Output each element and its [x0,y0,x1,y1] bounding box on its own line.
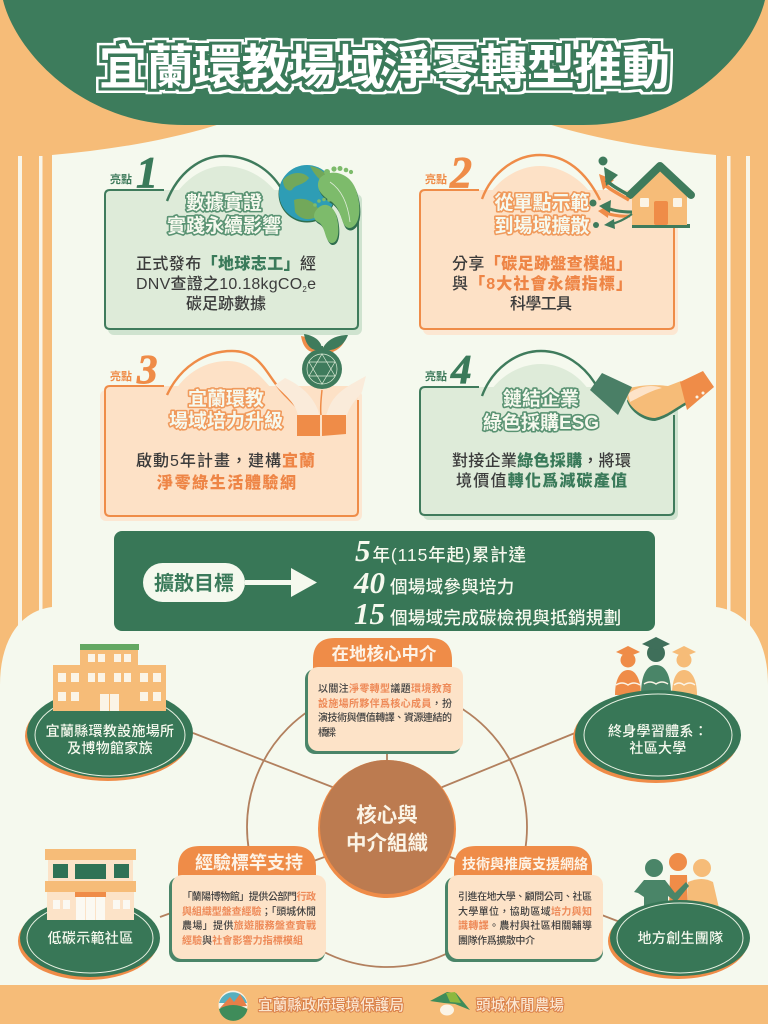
text: benchmark body: 農場」提供旅遊服務盤查實戰 [182,919,316,932]
node: community university [573,637,741,783]
icon: handshake [590,371,714,421]
icon: low-carbon building [45,849,136,920]
title: 宜蘭環教場域淨零轉型推動 [99,42,670,95]
text: highlight 3 body [136,451,315,492]
label: highlight 2: 2 [449,148,472,197]
text: highlight 2 body: 分享「碳足跡盤查模組」 [452,254,632,273]
core circle: 核心與 [356,803,418,827]
label: community university: 終身學習體系： [608,723,708,739]
text: benchmark body [182,890,316,947]
icon: people [634,853,719,908]
text: highlight 1 body: 2 [302,285,307,294]
text: highlight 4 body: 境價值轉化爲減碳產值 [456,471,627,490]
header green dome [3,0,765,125]
card: local core intermediary [305,638,463,754]
heading: local core: 在地核心中介 [332,644,437,664]
logo: Toucheng farm [430,992,470,1016]
text: highlight 4 body [452,451,631,490]
label: low-carbon community: 低碳示範社區 [48,930,133,946]
logo: environmental protection bureau [218,990,248,1021]
heading: benchmark support: 經驗標竿支持 [195,852,303,873]
text: highlight 3 body: 淨零綠生活體驗網 [157,473,296,492]
heading: technical network: 技術與推廣支援網絡 [462,856,588,872]
label: community university: 社區大學 [629,740,687,756]
footer [0,985,768,1024]
label: highlight 1: 亮點 [110,172,132,186]
icon: hands holding plant [275,334,366,436]
label: highlight 1: 1 [136,148,158,197]
heading: highlight 4: 鏈結企業 [503,387,579,410]
card: benchmark support [169,846,326,962]
panel: highlight 2 [420,148,691,335]
network ring and connector lines [160,687,620,967]
text: local core body [318,682,452,739]
icon: museum building [53,644,166,711]
text: highlight 4 body: 對接企業綠色採購，將環 [452,451,631,470]
text: goal lines: 15 個場域完成碳檢視與抵銷規劃 [354,596,621,631]
text: goal lines [353,533,621,631]
pill: goal label: 擴散目標 [154,572,234,595]
label: highlight 2 [425,148,472,197]
text: farm name: 頭城休閒農場 [476,997,564,1014]
icon: graduates [615,637,697,695]
text: technical network body: 引進在地大學、顧問公司、社區 [458,890,592,903]
label: highlight 2: 亮點 [425,172,447,186]
text: highlight 1 body [136,254,316,313]
text: benchmark body: 與組織型盤查經驗；「頭城休閒 [182,905,316,918]
heading: highlight 1: 數據實證 [186,191,262,214]
text: highlight 1 body: DNV查證之10.18kgCO [136,276,302,293]
core circle [318,760,456,898]
text: highlight 2 body [452,254,632,313]
icon: globe and footprints [278,165,360,245]
heading: highlight 3: 宜蘭環教 [188,387,264,410]
text: technical network body: 識轉譯。農村與社區相關輔導 [458,919,592,932]
text: technical network body [458,890,592,947]
icon: house with arrows [590,156,691,229]
text: technical network body: 團隊作爲擴散中介 [458,934,535,947]
text: benchmark body: 「蘭陽博物館」提供公部門行政 [182,890,316,903]
arrow [245,568,317,597]
pill: goal label [143,563,245,602]
label: highlight 3 [110,346,158,392]
text: technical network body: 大學單位，協助區域培力與知 [458,905,592,918]
text: highlight 1 body: 正式發布「地球志工」經 [136,254,316,273]
text: highlight 1 body: 碳足跡數據 [186,295,266,313]
text: local core body: 以關注淨零轉型議題環境教育 [318,682,452,695]
label: highlight 3: 亮點 [110,369,132,383]
panel: highlight 1 [105,148,362,335]
heading: highlight 2: 從單點示範 [494,191,590,214]
text: highlight 2 body: 與「8大社會永續指標」 [452,274,632,293]
node: low-carbon community [18,849,160,980]
label: facilities: 及博物館家族 [67,740,153,756]
panel: expansion goals [114,531,655,631]
heading: highlight 3: 場域培力升級 [169,409,283,432]
node: local revitalization teams [608,853,750,979]
text: local core body: 設施場所夥伴爲核心成員，扮 [318,697,452,710]
heading: highlight 1: 實踐永續影響 [167,214,281,237]
card: technical and outreach network [445,846,603,962]
heading: highlight 2: 到場域擴散 [494,214,590,237]
text: goal lines: 5年(115年起)累計達 [355,533,527,568]
heading: highlight 4: 綠色採購ESG [483,412,599,434]
panel: highlight 4 [420,346,714,520]
core circle: 中介組織 [346,832,428,855]
text: local core body: 橋樑 [318,726,336,739]
text: bureau name: 宜蘭縣政府環境保護局 [258,996,404,1014]
label: local revitalization: 地方創生團隊 [638,930,723,946]
text: benchmark body: 經驗與社會影響力指標模組 [182,934,303,947]
label: highlight 3: 3 [136,346,158,392]
label: highlight 4 [425,346,472,392]
panel: highlight 3 [100,334,366,521]
text: highlight 1 body: e [307,276,316,293]
text: highlight 2 body: 科學工具 [510,295,572,313]
label: highlight 1 [110,148,158,197]
label: highlight 4: 4 [450,346,472,392]
text: local core body: 演技術與價值轉譯、資源連結的 [318,711,452,724]
label: highlight 4: 亮點 [425,369,447,383]
text: highlight 3 body: 啟動5年計畫，建構宜蘭 [136,451,315,470]
text: goal lines: 40 個場域參與培力 [353,565,515,600]
node: environmental facilities and museums [25,644,193,781]
label: facilities: 宜蘭縣環教設施場所 [46,723,174,739]
